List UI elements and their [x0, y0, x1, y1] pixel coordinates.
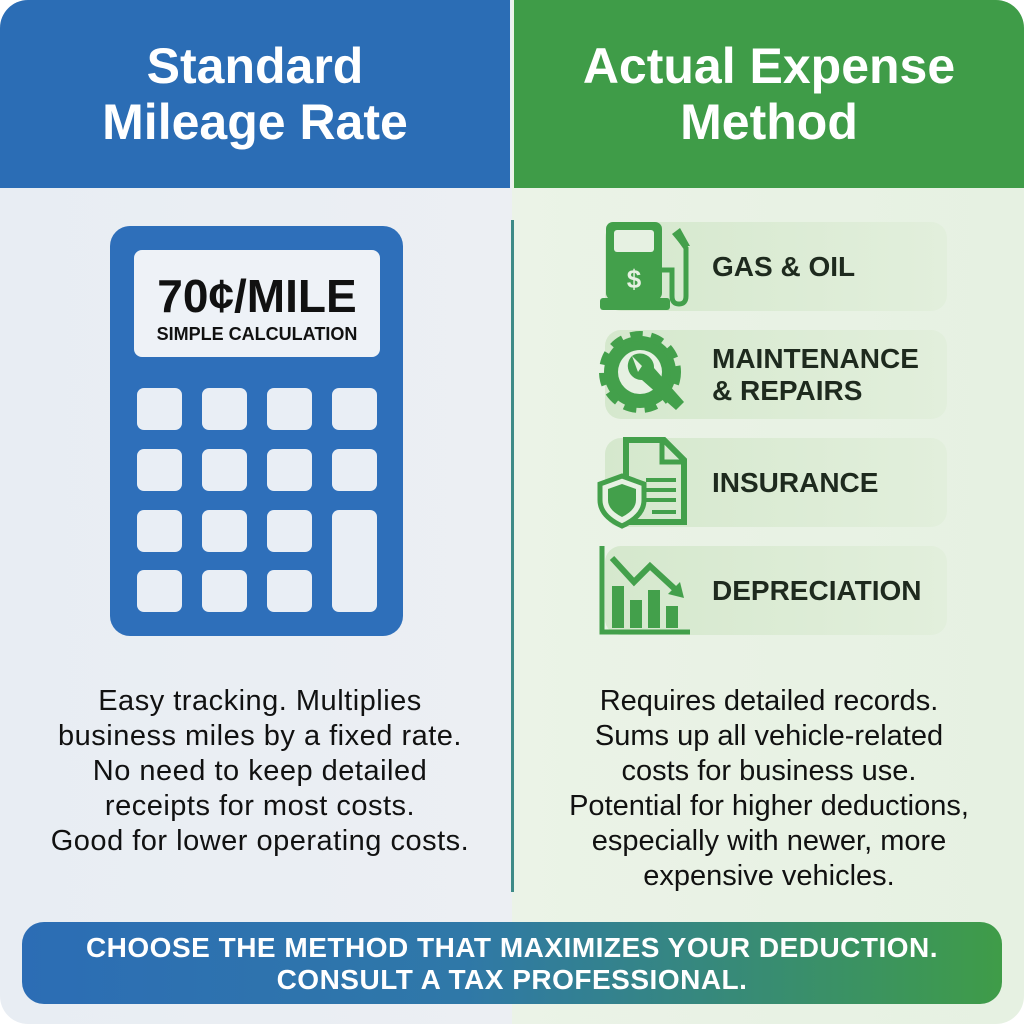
- text: actual description: expensive vehicles.: [643, 860, 895, 892]
- header: standard mileage rate: Mileage Rate: [102, 94, 408, 150]
- calculator screen: 70¢/MILE: [157, 270, 357, 322]
- card: insurance: INSURANCE: [712, 466, 878, 498]
- text: standard description: [51, 685, 469, 857]
- card: depreciation: [605, 546, 947, 635]
- card: maintenance: [605, 330, 947, 419]
- divider line: [511, 220, 514, 892]
- card: maintenance: & REPAIRS: [712, 374, 862, 406]
- header: actual expense method: [514, 0, 1024, 188]
- card: depreciation: DEPRECIATION: [712, 574, 922, 606]
- text: actual description: especially with newer, more: [592, 825, 946, 857]
- bottom banner: CHOOSE THE METHOD THAT MAXIMIZES YOUR DEDUCTION.: [86, 932, 938, 963]
- text: standard description: Easy tracking. Multiplies: [98, 685, 422, 717]
- header: standard mileage rate: [0, 0, 510, 188]
- icon: gear wrench: [599, 331, 684, 413]
- text: actual description: Requires detailed records.: [600, 685, 938, 717]
- icon: insurance document: [598, 437, 687, 529]
- text: actual description: Potential for higher deductions,: [569, 790, 969, 822]
- bottom banner: CONSULT A TAX PROFESSIONAL.: [277, 964, 747, 995]
- calculator screen: SIMPLE CALCULATION: [157, 324, 357, 344]
- icon: gas pump: [600, 222, 690, 310]
- card: gas & oil: [605, 222, 947, 311]
- text: actual description: Sums up all vehicle-related: [595, 720, 943, 752]
- text: actual description: costs for business use.: [622, 755, 916, 787]
- icon: gas pump: $: [627, 264, 642, 294]
- text: standard description: Good for lower operating costs.: [51, 825, 469, 857]
- bottom banner: [22, 922, 1002, 1004]
- text: standard description: No need to keep detailed: [93, 755, 427, 787]
- icon: depreciation chart: [600, 546, 690, 634]
- calculator screen: [134, 250, 380, 357]
- calculator: [110, 226, 403, 636]
- card: gas & oil: GAS & OIL: [712, 250, 855, 282]
- text: standard description: business miles by a fixed rate.: [58, 720, 462, 752]
- card: maintenance: MAINTENANCE: [712, 342, 919, 374]
- text: actual description: [569, 685, 969, 892]
- header: actual expense method: Actual Expense: [583, 38, 955, 94]
- card: insurance: [605, 438, 947, 527]
- header: actual expense method: Method: [680, 94, 858, 150]
- header: standard mileage rate: Standard: [147, 38, 363, 94]
- text: standard description: receipts for most costs.: [105, 790, 415, 822]
